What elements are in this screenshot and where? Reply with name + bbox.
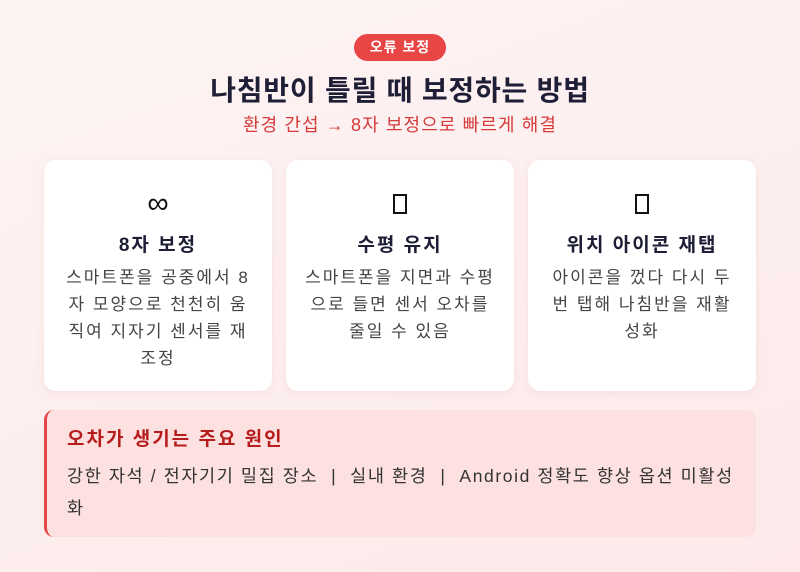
panel: causes bbox=[44, 410, 756, 537]
title: 나침반이 틀릴 때 보정하는 방법 bbox=[210, 75, 590, 106]
panel: 위치 아이콘 재탭 bbox=[528, 160, 756, 391]
icon: infinity: ∞ bbox=[147, 187, 169, 220]
subtitle: 환경 간섭 → 8자 보정으로 빠르게 해결 bbox=[243, 115, 557, 135]
card title: 8자 보정 bbox=[119, 235, 197, 256]
icon: location box bbox=[635, 194, 649, 214]
icon: phone box bbox=[393, 194, 407, 214]
causes text: 강한 자석 / 전자기기 밀집 장소 | 실내 환경 | Android 정확도 향상 옵션 미활성화 bbox=[67, 466, 734, 518]
card description: 스마트폰을 공중에서 8자 모양으로 천천히 움직여 지자기 센서를 재조정 bbox=[66, 268, 250, 368]
badge: 오류 보정 bbox=[370, 39, 430, 55]
panel: 8자 보정 bbox=[44, 160, 272, 391]
card description: 스마트폰을 지면과 수평으로 들면 센서 오차를 줄일 수 있음 bbox=[305, 268, 495, 341]
causes heading: 오차가 생기는 주요 원인 bbox=[67, 429, 284, 450]
panel: 수평 유지 bbox=[286, 160, 514, 391]
card title: 수평 유지 bbox=[357, 235, 443, 256]
badge bbox=[354, 34, 446, 61]
card description: 아이콘을 껐다 다시 두 번 탭해 나침반을 재활성화 bbox=[553, 268, 731, 341]
card title: 위치 아이콘 재탭 bbox=[567, 235, 717, 256]
